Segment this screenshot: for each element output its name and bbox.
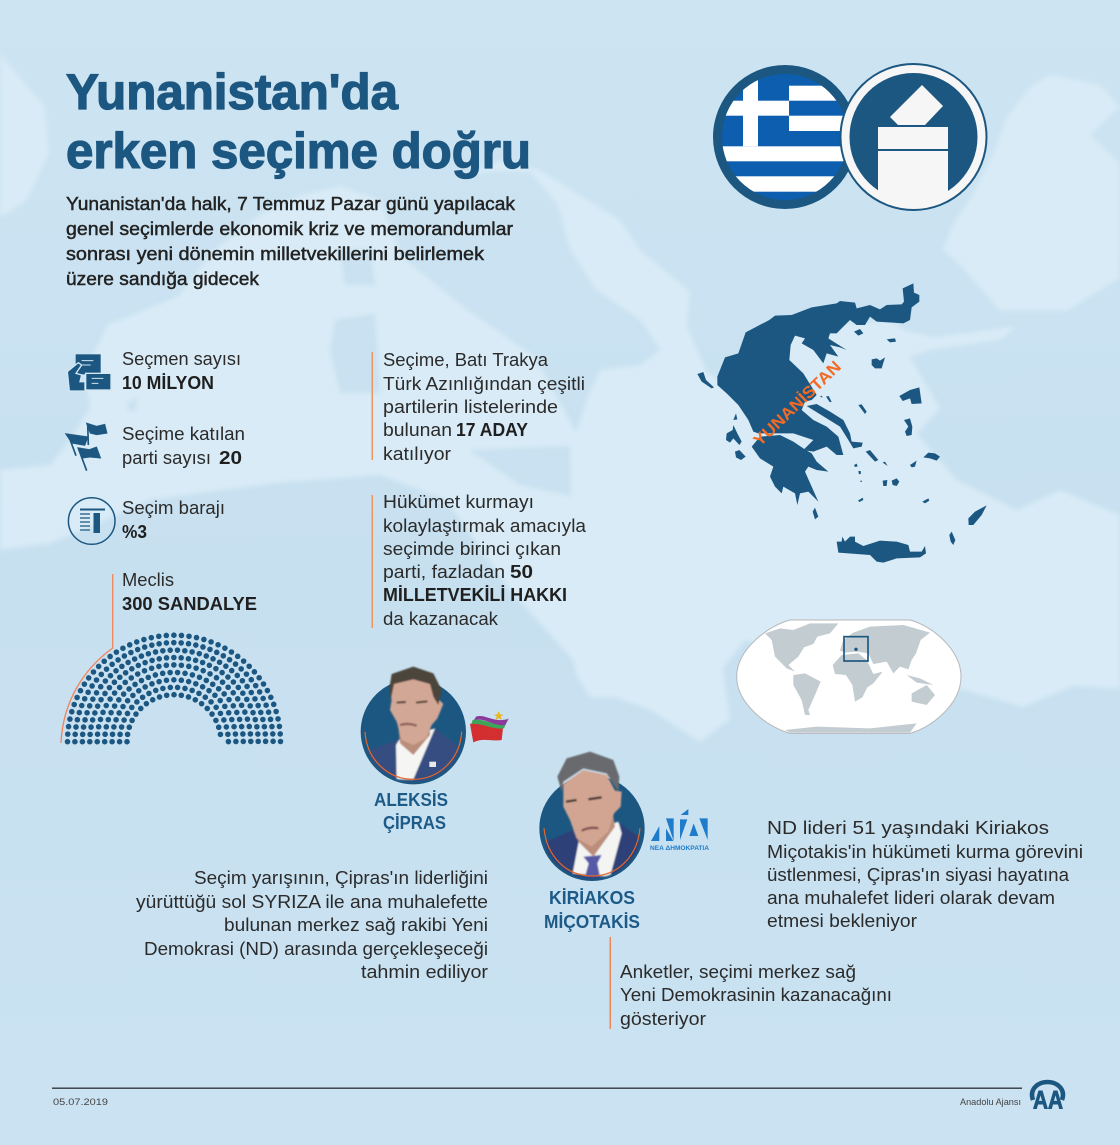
text block: race description: bulunan merkez sağ rakibi Yeni <box>224 915 488 935</box>
text block: polls: Yeni Demokrasinin kazanacağını <box>620 985 892 1005</box>
logo: Nea Dimokratia: ΝΕΑ ΔΗΜΟΚΡΑΤΙΑ <box>650 845 710 852</box>
icon: flags <box>65 423 107 471</box>
name: Kiriakos Miçotakis: MİÇOTAKİS <box>544 911 640 932</box>
text block: race description: yürüttüğü sol SYRIZA ile ana muhalefette <box>136 892 488 912</box>
stat: party count: parti sayısı <box>122 448 211 468</box>
icon: hand with ballots <box>67 354 111 391</box>
name: Aleksis Çipras: ÇİPRAS <box>383 812 446 833</box>
text block: polls: Anketler, seçimi merkez sağ <box>620 962 856 982</box>
text block: Western Thrace candidates: katılıyor <box>383 444 451 464</box>
map label: Yunanistan: YUNANİSTAN <box>750 358 845 450</box>
text block: polls: gösteriyor <box>620 1009 706 1029</box>
text block: ND leader expectation: üstlenmesi, Çipras'ın siyasi hayatına <box>767 865 1070 885</box>
stat: election threshold <box>68 498 225 544</box>
intro text block: üzere sandığa gidecek <box>66 269 260 289</box>
map of Greece <box>697 283 987 563</box>
text block: bonus seats: Hükümet kurmayı <box>383 492 534 512</box>
stat: voter count <box>67 349 241 393</box>
text block: ND leader expectation: ana muhalefet lideri olarak devam <box>767 888 1055 908</box>
name: Kiriakos Miçotakis: KİRİAKOS <box>549 887 635 908</box>
logo: SYRIZA flag <box>470 711 509 742</box>
logo: Nea Dimokratia <box>650 809 710 852</box>
parliament seats: 300 SANDALYE <box>122 594 257 614</box>
icon: ballot box badge <box>840 64 986 211</box>
text block: Western Thrace candidates: 17 ADAY <box>456 420 528 440</box>
parliament seats <box>61 570 280 743</box>
hemicycle seat chart <box>68 635 280 742</box>
text block: ND leader expectation: etmesi bekleniyor <box>767 911 917 931</box>
icon: threshold gauge <box>68 498 115 544</box>
stat: party count: 20 <box>219 448 242 468</box>
text block: Western Thrace candidates: partilerin listelerinde <box>383 397 558 417</box>
text block: ND leader expectation: Miçotakis'in hükümeti kurma görevini <box>767 842 1083 862</box>
text block: race description: tahmin ediliyor <box>361 962 488 982</box>
text block: ND leader expectation <box>767 818 1083 931</box>
text block: polls <box>610 937 892 1029</box>
name: Kiriakos Miçotakis <box>544 887 640 932</box>
intro text block <box>66 194 516 289</box>
text block: bonus seats: seçimde birinci çıkan <box>383 539 561 559</box>
text block: bonus seats: 50 <box>510 562 533 582</box>
footer rule <box>52 1088 1022 1089</box>
text block: race description: Seçim yarışının, Çipras'ın liderliğini <box>194 868 488 888</box>
stat: election threshold: Seçim barajı <box>122 498 225 518</box>
text block: ND leader expectation: ND lideri 51 yaşındaki Kiriakos <box>767 818 1049 838</box>
text block: race description <box>136 868 488 982</box>
text block: race description: Demokrasi (ND) arasında gerçekleşeceği <box>144 939 488 959</box>
stat: party count: Seçime katılan <box>122 424 245 444</box>
intro text block: genel seçimlerde ekonomik kriz ve memorandumlar <box>66 219 513 239</box>
orange leader line <box>61 574 113 743</box>
name: Aleksis Çipras: ALEKSİS <box>374 789 448 810</box>
stat: voter count: Seçmen sayısı <box>122 349 241 369</box>
name: Aleksis Çipras <box>374 789 448 833</box>
title: erken seçime doğru <box>66 123 531 179</box>
text block: bonus seats: parti, fazladan <box>383 562 505 582</box>
stat: election threshold: %3 <box>122 522 147 542</box>
footer date: 05.07.2019 <box>53 1097 108 1107</box>
logo: Anadolu Agency: AA <box>1033 1086 1063 1114</box>
world locator map <box>737 620 961 733</box>
text block: Western Thrace candidates: Türk Azınlığından çeşitli <box>383 374 585 394</box>
text block: Western Thrace candidates: bulunan <box>383 420 452 440</box>
portrait: Aleksis Çipras <box>361 667 466 787</box>
stat: voter count: 10 MİLYON <box>122 373 214 393</box>
title <box>66 64 531 179</box>
title: Yunanistan'da <box>66 64 399 120</box>
stat: party count <box>65 423 245 471</box>
text block: bonus seats: kolaylaştırmak amacıyla <box>383 516 587 536</box>
footer credit: Anadolu Ajansı <box>960 1097 1021 1108</box>
parliament seats: Meclis <box>122 570 174 590</box>
intro text block: sonrası yeni dönemin milletvekillerini belirlemek <box>66 244 485 264</box>
text block: bonus seats <box>372 492 587 629</box>
icon: flag of Greece badge <box>713 65 848 209</box>
text block: bonus seats: MİLLETVEKİLİ HAKKI <box>383 585 567 605</box>
text block: bonus seats: da kazanacak <box>383 609 499 629</box>
portrait: Kiriakos Miçotakis <box>539 752 645 887</box>
intro text block: Yunanistan'da halk, 7 Temmuz Pazar günü yapılacak <box>66 194 516 214</box>
text block: Western Thrace candidates <box>372 350 585 464</box>
text block: Western Thrace candidates: Seçime, Batı Trakya <box>383 350 549 370</box>
